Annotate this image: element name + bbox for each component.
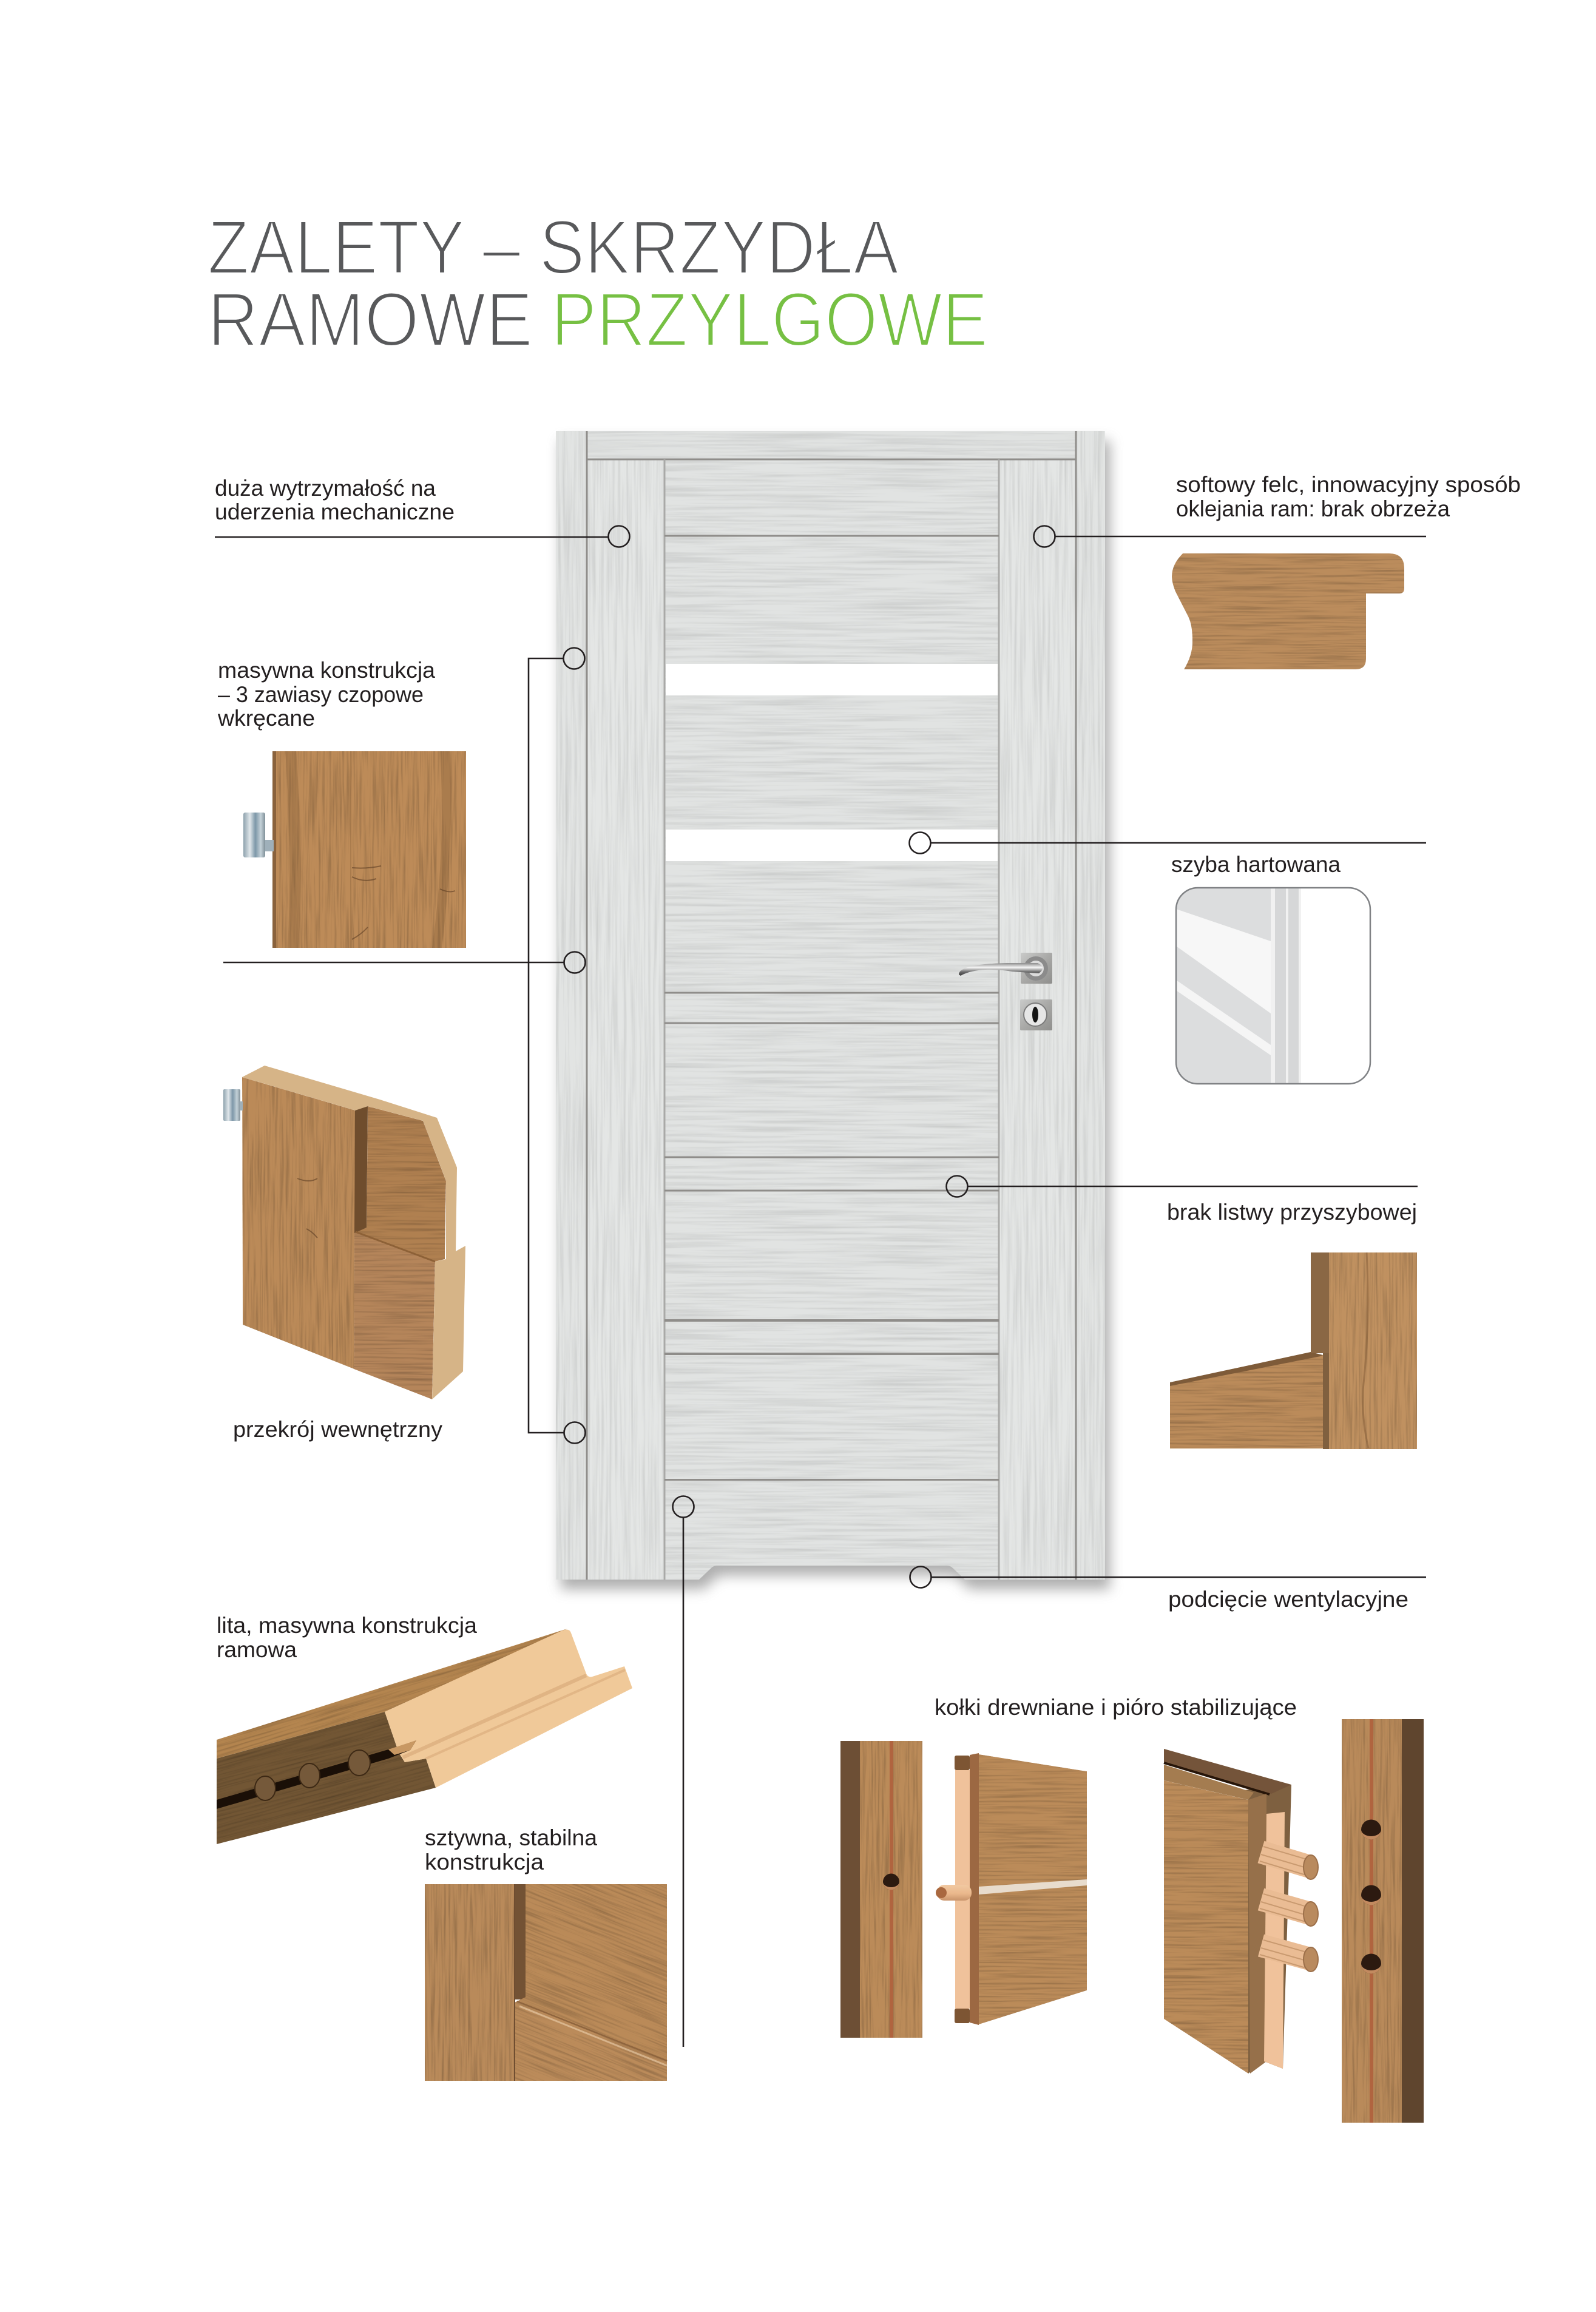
- label: rigid stable construction: konstrukcja: [425, 1850, 544, 1874]
- label: internal cross-section: przekrój wewnętrzny: [233, 1417, 443, 1442]
- label: impact resistance: [215, 476, 455, 524]
- label: solid frame construction: ramowa: [217, 1637, 297, 1662]
- label: soft rebate: softowy felc, innowacyjny sposób: [1176, 472, 1521, 497]
- glass pane lower: [666, 830, 998, 861]
- door lock: [1020, 999, 1052, 1030]
- title: [208, 204, 988, 362]
- label: dowels and tongue: kołki drewniane i pióro stabilizujące: [935, 1695, 1297, 1720]
- image: glass edge without bead: [1170, 1252, 1417, 1449]
- label: massive construction: masywna konstrukcja: [218, 658, 435, 683]
- label: soft rebate: oklejania ram: brak obrzeża: [1176, 496, 1450, 521]
- door: [556, 431, 1110, 1589]
- label: massive construction: – 3 zawiasy czopowe: [218, 682, 424, 707]
- label: solid frame construction: [217, 1613, 477, 1662]
- title: RAMOWE: [208, 277, 533, 362]
- glass pane upper: [666, 664, 998, 695]
- image: tempered glass detail: [1176, 888, 1370, 1084]
- callout lines and markers: [215, 526, 1426, 2047]
- door handle: [959, 953, 1052, 984]
- title: PRZYLGOWE: [551, 277, 988, 362]
- label: tempered glass: szyba hartowana: [1171, 852, 1341, 877]
- title: ZALETY – SKRZYDŁA: [208, 204, 899, 290]
- image: hinge on oak panel: [243, 751, 466, 948]
- label: massive construction: wkręcane: [217, 706, 315, 731]
- label: no glazing bead: brak listwy przyszybowej: [1167, 1200, 1417, 1225]
- label: rigid stable construction: sztywna, stabilna: [425, 1825, 597, 1850]
- image: internal cross-section: [223, 1066, 465, 1399]
- label: impact resistance: uderzenia mechaniczne: [215, 499, 455, 524]
- image: rebate profile: [1172, 553, 1404, 669]
- label: soft rebate: [1176, 472, 1521, 521]
- label: massive construction: [217, 658, 435, 731]
- label: ventilation undercut: podcięcie wentylacyjne: [1168, 1587, 1408, 1612]
- label: rigid stable construction: [425, 1825, 597, 1874]
- label: solid frame construction: lita, masywna konstrukcja: [217, 1613, 477, 1638]
- image: edge strip with one hole: [840, 1741, 922, 2038]
- label: impact resistance: duża wytrzymałość na: [215, 476, 436, 501]
- image: frame beam: [217, 1629, 632, 1844]
- dowel group: [1260, 1847, 1318, 1972]
- image: edge strip with three holes: [1342, 1719, 1424, 2123]
- image: panel with single dowel: [936, 1753, 1087, 2025]
- image: frame corner joint: [425, 1884, 668, 2081]
- image: panel with three dowels: [1164, 1749, 1318, 2074]
- infographic canvas: [211, 221, 1520, 2123]
